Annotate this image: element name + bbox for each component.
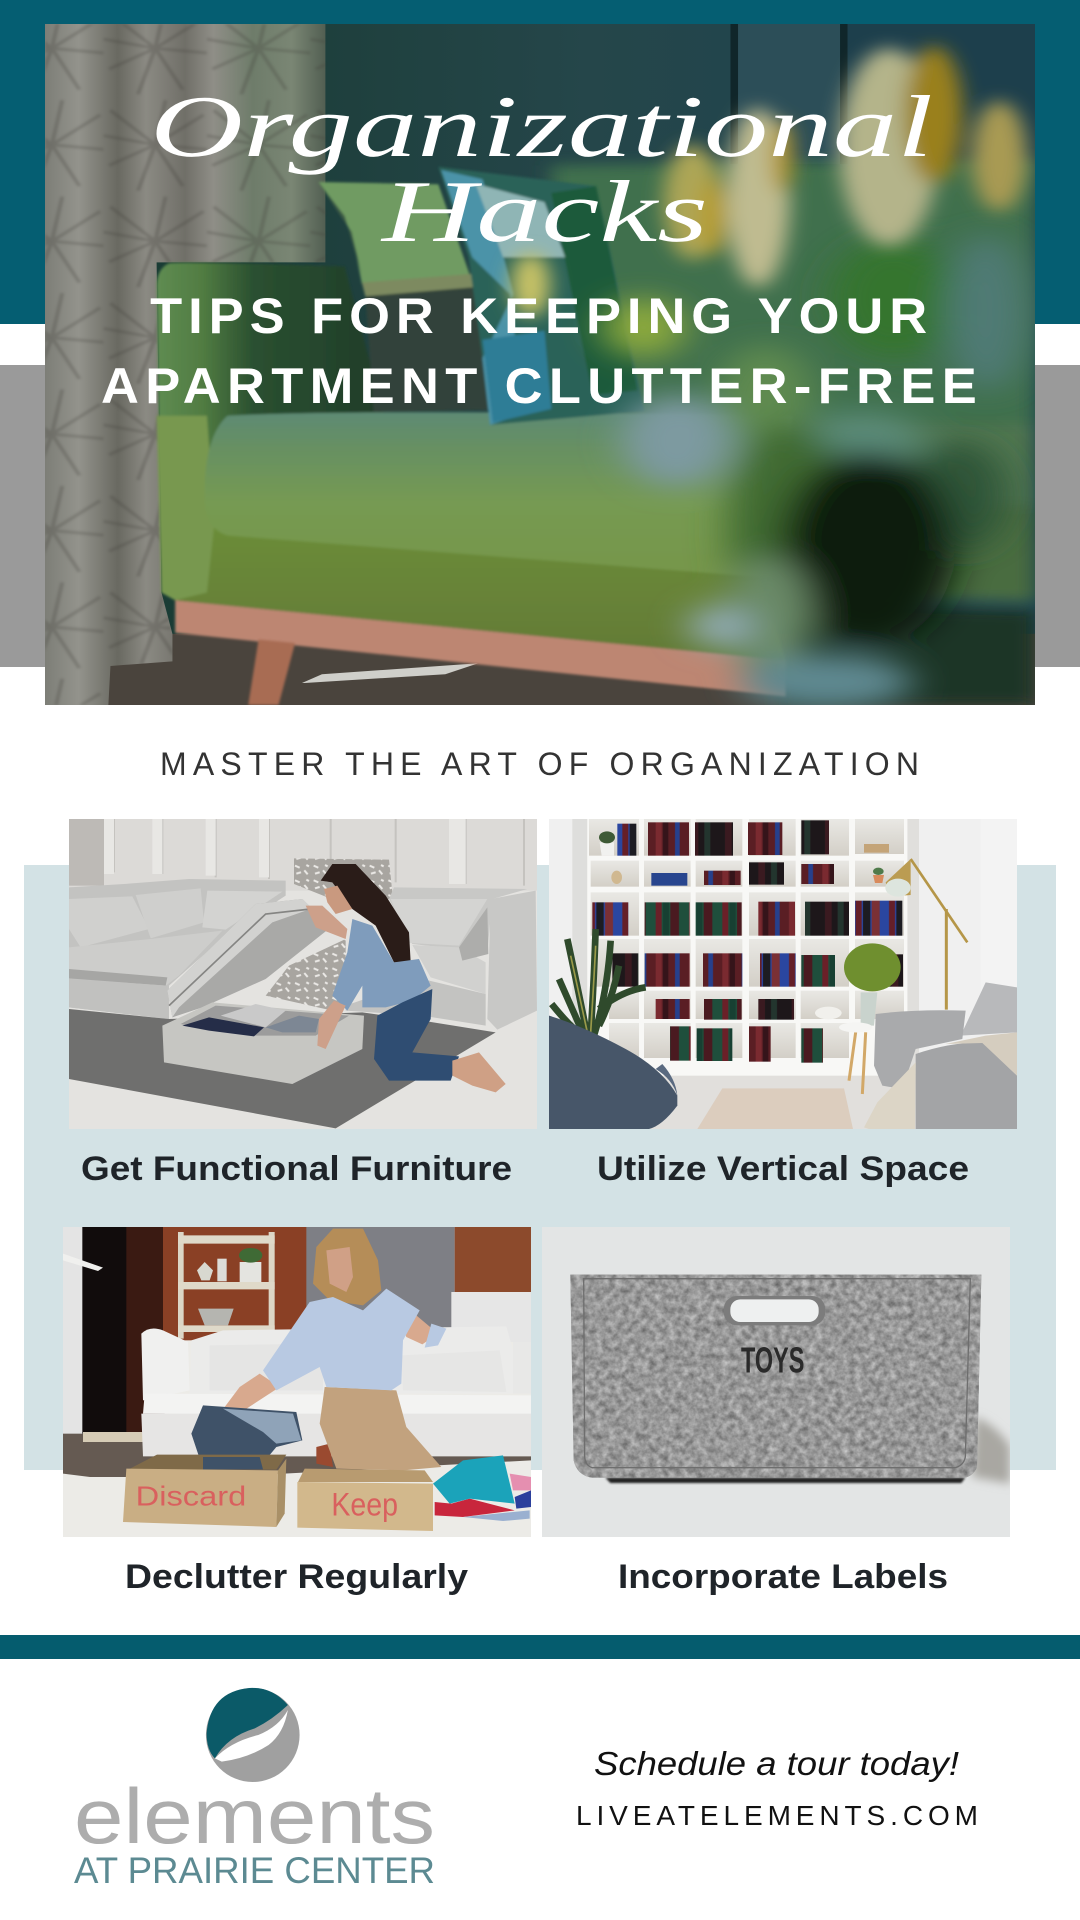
- ottoman box: [162, 1002, 364, 1084]
- woman: [321, 864, 411, 962]
- rug: [697, 1088, 853, 1129]
- floor: [549, 1074, 1017, 1129]
- seat cushion: [205, 412, 792, 578]
- grey sofa: [961, 982, 1017, 1036]
- hero subtitle: TIPS FOR KEEPING YOUR: [150, 288, 927, 344]
- keep box: [298, 1469, 433, 1482]
- clothes pile: [510, 1474, 531, 1490]
- discard box: [128, 1455, 286, 1470]
- photo: functional furniture: [69, 819, 537, 1129]
- ottoman lid: [167, 899, 331, 1017]
- floor: [63, 1434, 531, 1477]
- rail: [175, 600, 786, 696]
- section heading: MASTER THE ART OF ORGANIZATION: [160, 746, 919, 782]
- photo: vertical bookshelf: [549, 819, 1017, 1129]
- blurred foliage: [602, 234, 1028, 710]
- green pillow: [319, 182, 471, 284]
- hero subtitle: [101, 288, 977, 410]
- label: Utilize Vertical Space: Utilize Vertical Space: [597, 1150, 969, 1188]
- pale blue panel: [24, 865, 1056, 1470]
- background band: teal top: [0, 0, 1080, 324]
- snake plant: [552, 929, 646, 1036]
- photo: declutter with boxes: Keep: [331, 1485, 398, 1522]
- thrown jeans: [191, 1405, 302, 1469]
- shelf ornaments: [600, 842, 614, 856]
- label: Declutter Regularly: Declutter Regularly: [125, 1558, 468, 1596]
- photo: TOYS felt bin: [542, 1227, 1010, 1537]
- logo: elements at Prairie Center: [74, 1688, 435, 1887]
- sofa back and right side, out of focus: [551, 159, 1035, 427]
- floor: [45, 634, 1035, 705]
- photo: declutter with boxes: Discard: [136, 1480, 246, 1511]
- left sofa: [69, 879, 286, 1019]
- call to action: [576, 1745, 978, 1831]
- bookcase: [587, 819, 907, 1076]
- rug: [69, 1009, 496, 1128]
- logo mark: [206, 1688, 300, 1782]
- bush and vase: [861, 992, 877, 1026]
- white sofa: [141, 1328, 190, 1400]
- hero photo: green sofa with curtain and tulips: [45, 24, 1035, 705]
- woman: [313, 1229, 381, 1305]
- label: Incorporate Labels: Incorporate Labels: [618, 1558, 948, 1596]
- lamp: [911, 859, 967, 942]
- floral pillow: [438, 167, 644, 425]
- books: [617, 824, 636, 856]
- arm: [157, 263, 386, 600]
- wall shelf: [178, 1232, 275, 1339]
- curtain: [45, 24, 325, 705]
- call to action: Schedule a tour today!: [594, 1745, 959, 1782]
- side table: [849, 1032, 866, 1094]
- hero title script: Organizational Hacks: Hacks: [381, 164, 708, 260]
- blue armchair: [549, 1016, 677, 1129]
- lower base: [175, 528, 786, 660]
- photo: declutter with boxes: [63, 1227, 531, 1537]
- hero title script: Organizational Hacks: [150, 79, 933, 260]
- call to action: LIVEATELEMENTS.COM: [576, 1800, 978, 1831]
- label: Get Functional Furniture: Get Functional Furniture: [81, 1150, 512, 1188]
- right sofa: [389, 887, 527, 952]
- hero title script: Organizational Hacks: Organizational: [150, 79, 933, 176]
- background band: grey: [0, 365, 1080, 667]
- rug: [63, 1460, 531, 1537]
- patterned chair: [294, 858, 393, 901]
- photo: TOYS felt bin: TOYS: [741, 1340, 804, 1381]
- logo: elements at Prairie Center: elements: [74, 1772, 435, 1860]
- footer divider bar: [0, 1635, 1080, 1659]
